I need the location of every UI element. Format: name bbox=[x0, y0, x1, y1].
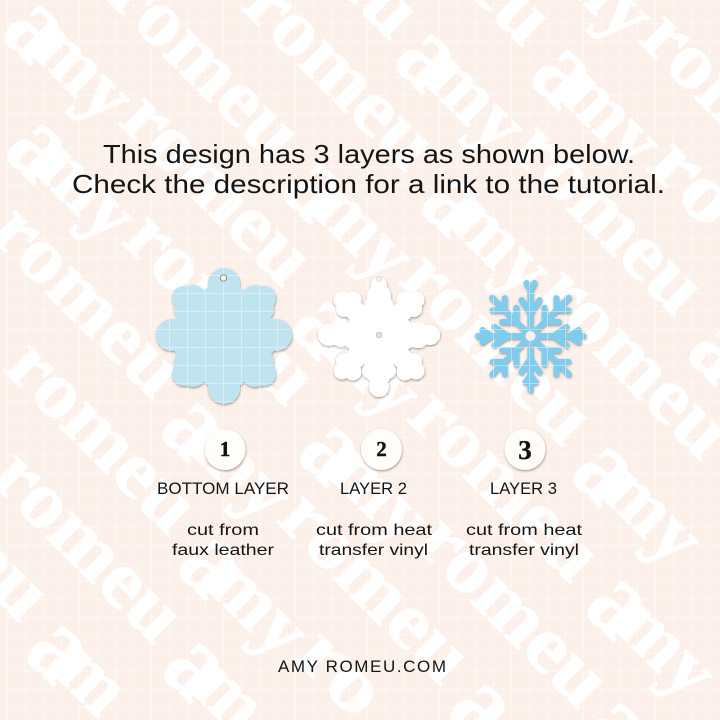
heading: This design has 3 layers as shown below. bbox=[103, 139, 635, 169]
footer website: AMY ROMEU.COM bbox=[278, 657, 446, 676]
label: layer 3: LAYER 3 bbox=[490, 479, 557, 498]
watermark pattern: amy romeu: romeu bbox=[384, 232, 613, 461]
heading: Check the description for a link to the tutorial. bbox=[72, 169, 665, 199]
text: layer 3 material bbox=[466, 522, 583, 559]
icon: bottom layer flower tag bbox=[156, 268, 292, 404]
watermark pattern: amy romeu: a bbox=[551, 409, 667, 526]
text: layer 2 material bbox=[316, 522, 433, 559]
icon: layer 2 white snowflake bbox=[318, 277, 440, 397]
watermark pattern: amy romeu: romeu bbox=[400, 495, 629, 720]
watermark pattern: amy romeu: a bbox=[400, 140, 516, 257]
icon: layer 3 blue snowflake bbox=[478, 283, 584, 390]
icon: flower tag hole bbox=[220, 275, 227, 281]
step 1 number badge: 1 bbox=[220, 437, 230, 461]
watermark pattern: amy romeu: romeu bbox=[392, 369, 621, 598]
watermark pattern: amy romeu: my bbox=[18, 4, 154, 139]
watermark pattern: amy romeu: a bbox=[140, 365, 256, 482]
text: bottom layer material: faux leather bbox=[172, 542, 275, 559]
watermark pattern: amy romeu: ro bbox=[279, 608, 405, 720]
text: bottom layer material bbox=[172, 522, 275, 559]
step 3 number badge: 3 bbox=[518, 435, 532, 465]
label: bottom layer: BOTTOM LAYER bbox=[157, 479, 289, 498]
watermark pattern: amy romeu: my bbox=[176, 402, 312, 537]
watermark pattern: amy romeu: romeu bbox=[104, 73, 333, 302]
watermark pattern: amy romeu: my bbox=[306, 300, 442, 435]
watermark pattern: amy romeu: romeu bbox=[107, 192, 336, 421]
watermark pattern: amy romeu: romeu bbox=[496, 102, 720, 331]
watermark pattern: amy romeu: my bbox=[410, 33, 546, 168]
watermark pattern: amy romeu: my bbox=[546, 49, 682, 184]
text: bottom layer material: cut from bbox=[187, 522, 259, 539]
text: layer 3 material: cut from heat bbox=[466, 522, 583, 539]
watermark pattern: amy romeu: my bbox=[21, 123, 157, 258]
text: layer 3 material: transfer vinyl bbox=[469, 542, 579, 559]
step 3 number badge bbox=[504, 429, 546, 470]
step 2 number badge: 2 bbox=[376, 437, 387, 461]
watermark pattern: amy romeu: a bbox=[278, 389, 394, 506]
watermark pattern: amy romeu: romeu bbox=[262, 471, 491, 700]
icon: white snowflake centre hole bbox=[376, 332, 382, 338]
step 1 number badge bbox=[204, 429, 246, 470]
label: layer 2: LAYER 2 bbox=[340, 479, 407, 498]
watermark pattern: amy romeu: a bbox=[157, 502, 273, 619]
heading bbox=[72, 139, 665, 199]
watermark pattern: amy romeu: a bbox=[5, 588, 121, 705]
watermark pattern: amy romeu: my bbox=[436, 177, 572, 312]
icon: white snowflake top hole bbox=[376, 276, 382, 282]
text: layer 2 material: cut from heat bbox=[316, 522, 433, 539]
watermark pattern: amy romeu: a bbox=[270, 263, 386, 380]
step 2 number badge bbox=[361, 429, 402, 470]
watermark pattern: amy romeu: my bbox=[314, 426, 450, 561]
watermark pattern: amy romeu: a bbox=[510, 12, 626, 129]
watermark pattern: amy romeu: my bbox=[193, 539, 329, 674]
watermark pattern: amy romeu: my bbox=[298, 163, 434, 298]
watermark pattern: amy romeu: a bbox=[262, 126, 378, 243]
watermark pattern: amy romeu: a bbox=[565, 543, 681, 660]
text: layer 2 material: transfer vinyl bbox=[319, 542, 428, 559]
